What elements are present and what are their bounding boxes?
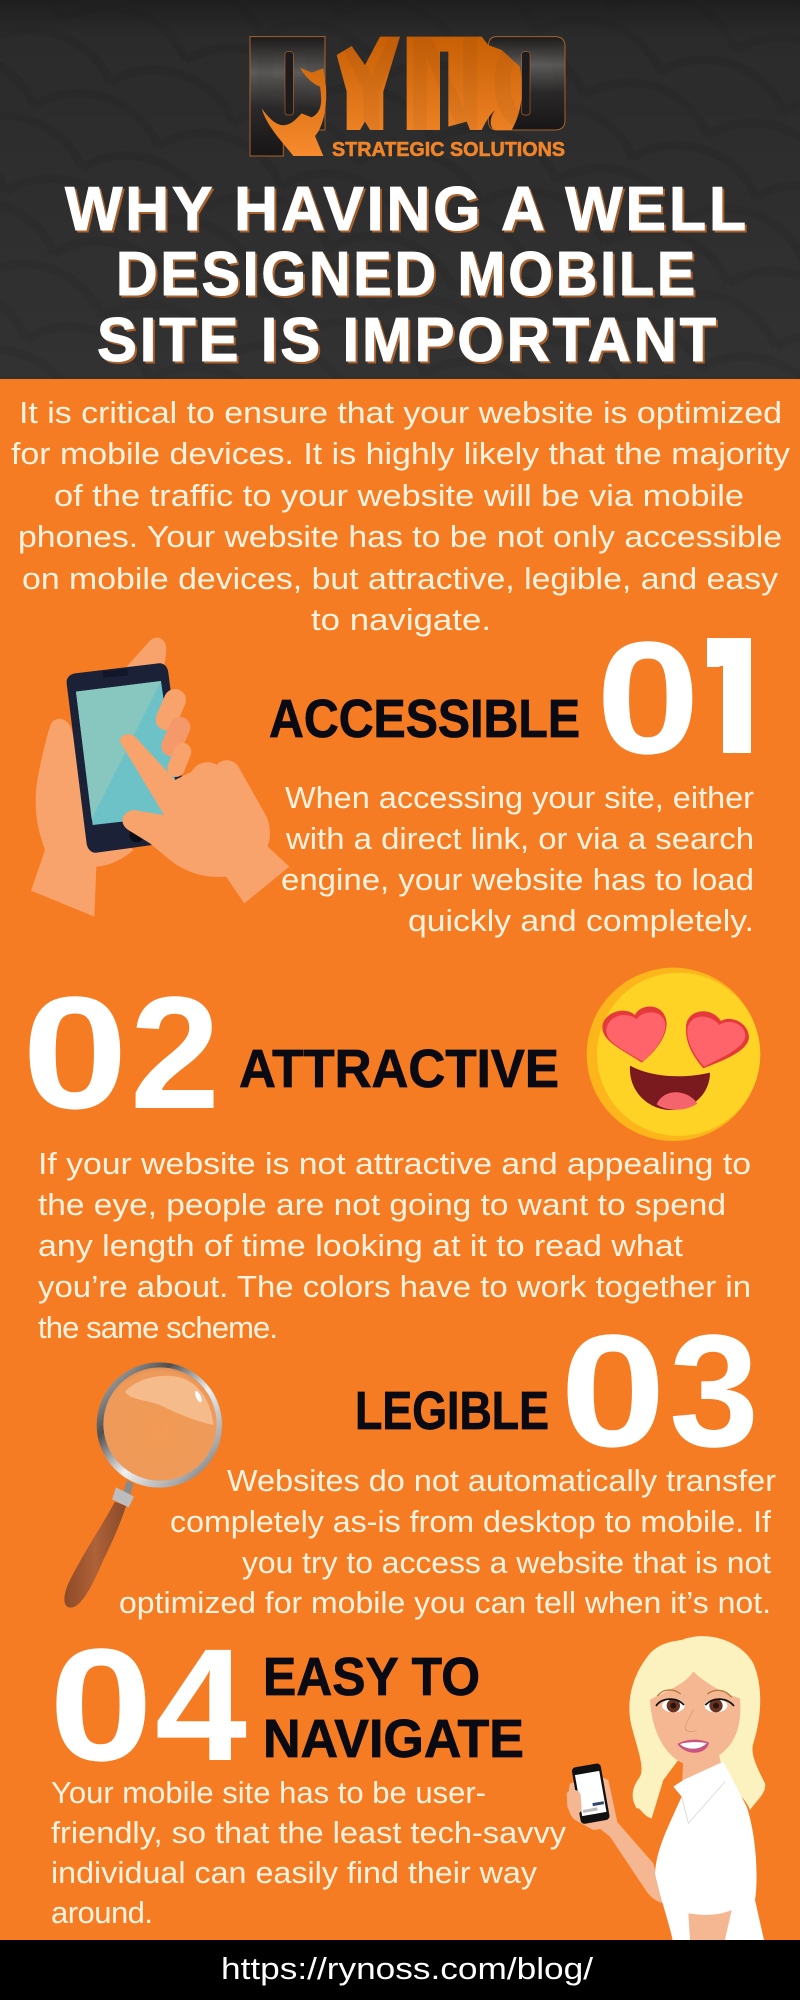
text: attractive body: the same scheme. — [38, 1310, 278, 1345]
heading: easy to navigate — [263, 1647, 524, 1769]
text: attractive body: you’re about. The colors have to work together in — [38, 1269, 751, 1304]
intro paragraph: to navigate. — [311, 602, 491, 637]
text: legible body: optimized for mobile you can tell when it’s not. — [119, 1585, 771, 1620]
text: accessible body: When accessing your site, either — [285, 780, 754, 815]
heading: attractive: ATTRACTIVE — [239, 1039, 559, 1099]
text: easy to navigate body: friendly, so that the least tech-savvy — [51, 1815, 567, 1850]
logo: Ryno Strategic Solutions: N — [406, 7, 484, 160]
heading: accessible: ACCESSIBLE — [269, 689, 580, 749]
text: easy to navigate body: around. — [51, 1895, 153, 1930]
logo: Ryno Strategic Solutions: R — [250, 7, 329, 160]
text: legible body: you try to access a website that is not — [242, 1545, 771, 1580]
number 04 — [49, 1615, 247, 1794]
intro paragraph: phones. Your website has to be not only accessible — [18, 519, 782, 554]
icon: hands holding phone — [31, 638, 289, 917]
title: DESIGNED MOBILE — [118, 242, 700, 311]
number 03: 3 — [669, 1301, 759, 1480]
number 02: 0 — [22, 963, 128, 1142]
logo: Ryno Strategic Solutions — [250, 7, 575, 161]
text: accessible body: with a direct link, or via a search — [285, 821, 754, 856]
text: easy to navigate body — [51, 1775, 567, 1930]
title: SITE IS IMPORTANT — [97, 306, 719, 375]
text: attractive body: the eye, people are not going to want to spend — [38, 1187, 726, 1222]
icon: heart eyes emoji — [587, 968, 760, 1141]
icon: magnifying glass — [64, 1362, 222, 1608]
intro paragraph: on mobile devices, but attractive, legible, and easy — [22, 561, 779, 596]
intro paragraph: of the traffic to your website will be via mobile — [54, 478, 744, 513]
intro paragraph: It is critical to ensure that your website is optimized — [19, 395, 782, 430]
text: accessible body: quickly and completely. — [408, 903, 754, 938]
title: DESIGNED MOBILE — [116, 240, 698, 309]
number 03 — [560, 1301, 759, 1480]
number 03: 0 — [560, 1301, 666, 1480]
logo: Ryno Strategic Solutions: Y — [335, 7, 408, 160]
number 01 — [603, 638, 751, 755]
footer url: https://rynoss.com/blog/ — [221, 1951, 593, 1986]
logo: Ryno Strategic Solutions: O — [490, 7, 575, 160]
title: WHY HAVING A WELL — [67, 177, 751, 246]
text: easy to navigate body: Your mobile site has to be user- — [51, 1775, 486, 1810]
text: accessible body: engine, your website has to load — [281, 862, 754, 897]
text: attractive body: If your website is not attractive and appealing to — [38, 1146, 751, 1181]
number 04: 0 — [49, 1615, 153, 1794]
text: legible body: Websites do not automatically transfer — [227, 1463, 776, 1498]
number 02 — [22, 963, 220, 1142]
footer bar — [0, 1940, 800, 2000]
text: legible body — [119, 1463, 776, 1620]
heading: easy to navigate: NAVIGATE — [263, 1709, 524, 1769]
title: WHY HAVING A WELL — [65, 175, 749, 244]
number 04: 4 — [155, 1615, 247, 1794]
text: legible body: completely as-is from desktop to mobile. If — [170, 1504, 771, 1539]
intro paragraph — [11, 395, 791, 637]
text: attractive body — [38, 1146, 751, 1345]
heading: legible: LEGIBLE — [355, 1381, 549, 1441]
text: easy to navigate body: individual can easily find their way — [51, 1855, 538, 1890]
text: accessible body — [281, 780, 754, 938]
header panel — [0, 0, 800, 379]
title — [65, 175, 751, 377]
illustration: woman holding phone — [567, 1636, 765, 1940]
intro paragraph: for mobile devices. It is highly likely that the majority — [11, 436, 791, 471]
number 02: 2 — [130, 963, 220, 1142]
number 01: 0 — [596, 608, 700, 787]
number 01: 1 — [690, 608, 779, 787]
text: attractive body: any length of time looking at it to read what — [38, 1228, 683, 1263]
heading: easy to navigate: EASY TO — [263, 1647, 480, 1707]
logo: Ryno Strategic Solutions: STRATEGIC SOLUTIONS — [332, 138, 565, 161]
title: SITE IS IMPORTANT — [99, 308, 721, 377]
